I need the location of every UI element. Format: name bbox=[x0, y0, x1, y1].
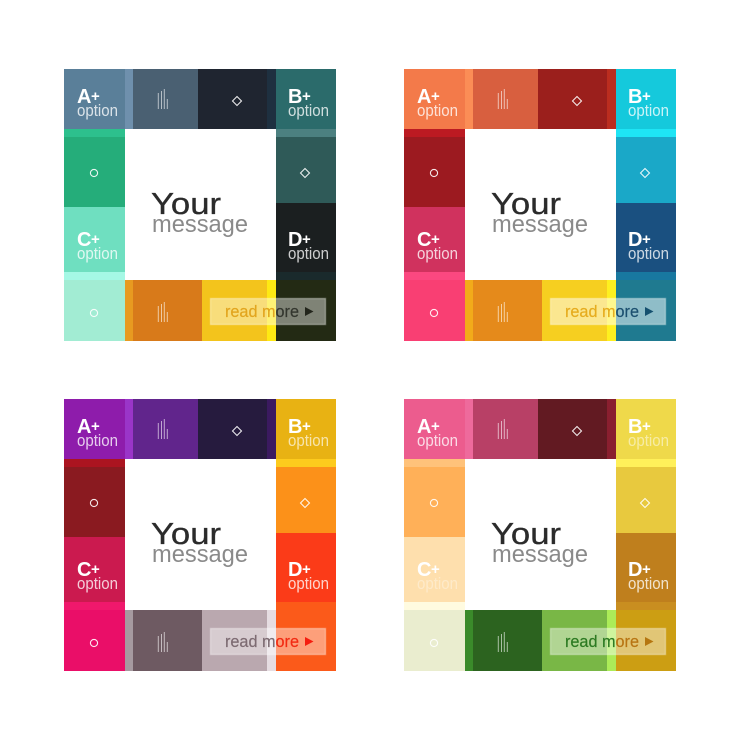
label: C+ option: + bbox=[91, 231, 100, 248]
label: B+ option: option bbox=[628, 102, 669, 120]
label: D+ option: option bbox=[288, 575, 329, 593]
button: read more: read more bbox=[225, 303, 299, 321]
icon: right diamond bbox=[640, 168, 650, 178]
label: D+ option bbox=[628, 559, 669, 593]
button: read more bbox=[210, 298, 326, 324]
label: D+ option: option bbox=[628, 575, 669, 593]
icon: top bars bbox=[158, 89, 167, 109]
icon: bottom bars bbox=[498, 632, 507, 652]
heading: your message: message bbox=[152, 211, 248, 238]
label: A+ option: + bbox=[91, 418, 100, 435]
label: A+ option: option bbox=[417, 102, 458, 120]
button: read more bbox=[550, 298, 666, 324]
icon: bottom bars bbox=[158, 632, 167, 652]
label: B+ option: B bbox=[628, 416, 642, 438]
heading: your message: Your bbox=[151, 516, 221, 551]
label: B+ option bbox=[288, 416, 329, 450]
icon: bottom circle bbox=[90, 309, 98, 317]
label: C+ option: C bbox=[77, 559, 91, 581]
icon: right diamond bbox=[300, 168, 310, 178]
label: A+ option: A bbox=[417, 416, 431, 438]
button: read more bbox=[210, 628, 326, 654]
label: A+ option: + bbox=[431, 418, 440, 435]
heading: your message: Your bbox=[491, 516, 561, 551]
label: D+ option: + bbox=[302, 561, 311, 578]
label: C+ option: C bbox=[77, 229, 91, 251]
label: C+ option bbox=[77, 229, 118, 263]
label: D+ option: D bbox=[628, 229, 642, 251]
label: D+ option: D bbox=[288, 559, 302, 581]
heading: your message bbox=[151, 186, 248, 238]
label: A+ option: option bbox=[417, 432, 458, 450]
button: read more bbox=[550, 628, 666, 654]
label: C+ option bbox=[77, 559, 118, 593]
icon: top diamond bbox=[232, 96, 242, 106]
label: B+ option: B bbox=[288, 416, 302, 438]
panel: purple and orange frame bbox=[64, 399, 336, 671]
label: A+ option: option bbox=[77, 432, 118, 450]
icon: bottom bars bbox=[158, 302, 167, 322]
label: D+ option: option bbox=[628, 245, 669, 263]
label: C+ option: + bbox=[91, 561, 100, 578]
label: B+ option: + bbox=[642, 88, 651, 105]
icon: top diamond bbox=[572, 96, 582, 106]
icon: top diamond bbox=[572, 426, 582, 436]
label: B+ option: + bbox=[302, 88, 311, 105]
label: C+ option: + bbox=[431, 231, 440, 248]
icon: left circle bbox=[90, 169, 98, 177]
icon: right diamond bbox=[300, 498, 310, 508]
heading: your message: message bbox=[492, 541, 588, 568]
label: A+ option: A bbox=[77, 416, 91, 438]
label: A+ option bbox=[77, 86, 118, 120]
label: A+ option: + bbox=[91, 88, 100, 105]
label: D+ option bbox=[288, 229, 329, 263]
label: B+ option: option bbox=[288, 432, 329, 450]
icon: bottom circle bbox=[90, 639, 98, 647]
heading: your message bbox=[491, 186, 588, 238]
label: C+ option: option bbox=[77, 575, 118, 593]
label: D+ option: D bbox=[628, 559, 642, 581]
heading: your message: Your bbox=[151, 186, 221, 221]
heading: your message: message bbox=[152, 541, 248, 568]
label: A+ option: A bbox=[77, 86, 91, 108]
label: C+ option: option bbox=[417, 575, 458, 593]
icon: top diamond bbox=[232, 426, 242, 436]
icon: left circle bbox=[430, 499, 438, 507]
label: D+ option: + bbox=[642, 561, 651, 578]
label: B+ option: + bbox=[642, 418, 651, 435]
label: D+ option: option bbox=[288, 245, 329, 263]
label: D+ option bbox=[288, 559, 329, 593]
label: D+ option: + bbox=[642, 231, 651, 248]
label: B+ option bbox=[628, 416, 669, 450]
label: C+ option: C bbox=[417, 229, 431, 251]
label: C+ option: option bbox=[77, 245, 118, 263]
label: C+ option: + bbox=[431, 561, 440, 578]
heading: your message: message bbox=[492, 211, 588, 238]
label: B+ option: B bbox=[288, 86, 302, 108]
icon: left circle bbox=[430, 169, 438, 177]
label: A+ option bbox=[417, 416, 458, 450]
label: B+ option: B bbox=[628, 86, 642, 108]
label: D+ option: D bbox=[288, 229, 302, 251]
icon: top bars bbox=[498, 419, 507, 439]
heading: your message bbox=[491, 516, 588, 568]
label: A+ option: A bbox=[417, 86, 431, 108]
label: A+ option: option bbox=[77, 102, 118, 120]
label: D+ option: + bbox=[302, 231, 311, 248]
panel: teal and green frame bbox=[64, 69, 336, 341]
icon: top bars bbox=[498, 89, 507, 109]
icon: left circle bbox=[90, 499, 98, 507]
label: A+ option: + bbox=[431, 88, 440, 105]
panel: pink and yellow frame bbox=[404, 399, 676, 671]
panel: orange and blue frame bbox=[404, 69, 676, 341]
icon: right diamond bbox=[640, 498, 650, 508]
label: C+ option: C bbox=[417, 559, 431, 581]
icon: top bars bbox=[158, 419, 167, 439]
heading: your message: Your bbox=[491, 186, 561, 221]
button: read more: read more bbox=[225, 633, 299, 651]
label: B+ option bbox=[628, 86, 669, 120]
label: D+ option bbox=[628, 229, 669, 263]
button: read more: read more bbox=[565, 303, 639, 321]
label: C+ option bbox=[417, 559, 458, 593]
button: read more: read more bbox=[565, 633, 639, 651]
icon: bottom circle bbox=[430, 639, 438, 647]
label: C+ option bbox=[417, 229, 458, 263]
label: B+ option: option bbox=[288, 102, 329, 120]
label: B+ option: option bbox=[628, 432, 669, 450]
label: A+ option bbox=[77, 416, 118, 450]
heading: your message bbox=[151, 516, 248, 568]
label: B+ option bbox=[288, 86, 329, 120]
icon: bottom bars bbox=[498, 302, 507, 322]
label: A+ option bbox=[417, 86, 458, 120]
icon: bottom circle bbox=[430, 309, 438, 317]
label: C+ option: option bbox=[417, 245, 458, 263]
label: B+ option: + bbox=[302, 418, 311, 435]
